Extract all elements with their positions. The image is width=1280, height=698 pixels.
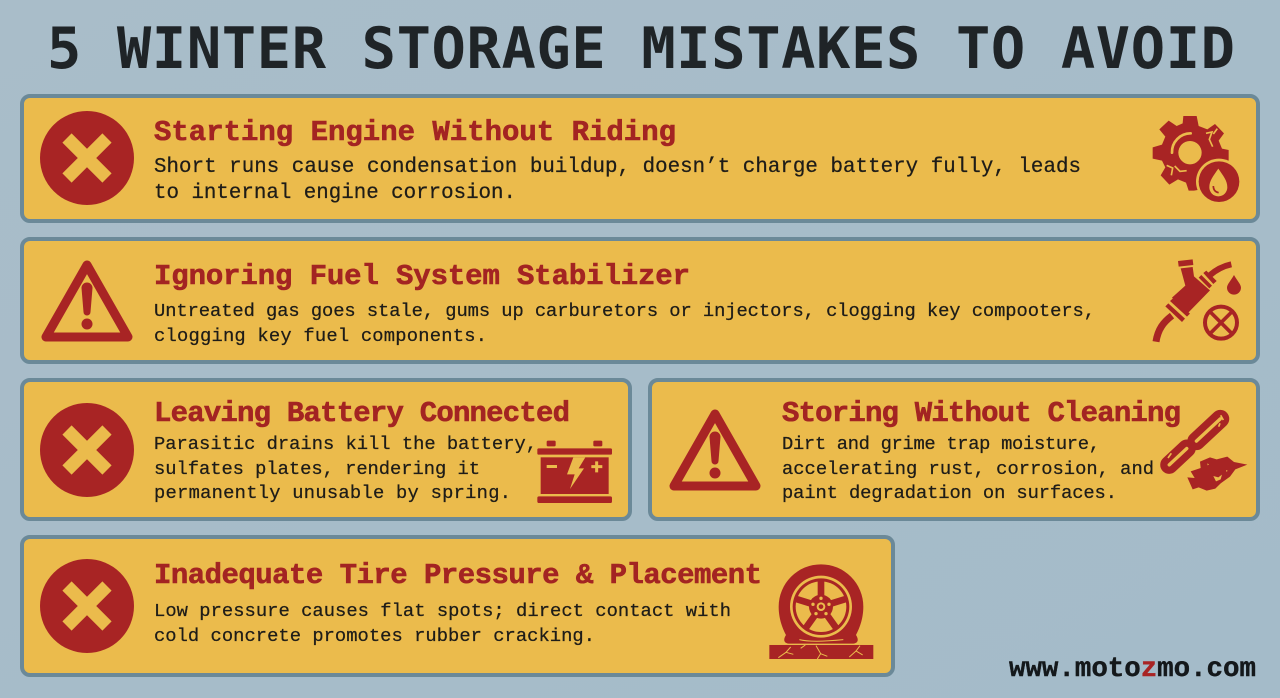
icon: warning triangle <box>46 265 128 337</box>
panel: storing without cleaning <box>650 380 1258 519</box>
body text: paint degradation on surfaces. <box>782 482 1117 504</box>
icon: car battery <box>537 441 612 503</box>
body text <box>154 433 537 504</box>
icon: flat tire on cracked concrete <box>769 564 873 659</box>
icon: red X circle <box>40 559 134 653</box>
body text: Dirt and grime trap moisture, <box>782 433 1100 455</box>
panel: inadequate tire pressure and placement <box>22 537 893 675</box>
heading: Inadequate Tire Pressure & Placement <box>154 559 762 592</box>
body text: Low pressure causes flat spots; direct contact with <box>154 600 731 622</box>
icon: red X circle <box>40 111 134 205</box>
panel: ignoring fuel system stabilizer <box>22 239 1258 362</box>
body text <box>782 433 1154 504</box>
body text: to internal engine corrosion. <box>154 182 516 205</box>
body text <box>154 300 1095 347</box>
body text: Parasitic drains kill the battery, <box>154 433 537 455</box>
website url: www.motozmo.com <box>1009 654 1256 685</box>
body text: Short runs cause condensation buildup, doesn’t charge battery fully, leads <box>154 156 1081 179</box>
icon: cracked gear with oil drop <box>1153 116 1242 205</box>
body text <box>154 156 1081 205</box>
icon: warning triangle <box>674 414 756 486</box>
heading: Ignoring Fuel System Stabilizer <box>154 260 690 293</box>
body text: cold concrete promotes rubber cracking. <box>154 625 595 647</box>
body text: clogging key fuel components. <box>154 325 487 347</box>
icon: rusty chain and rust patch <box>1162 411 1247 491</box>
icon: red X circle <box>40 403 134 497</box>
panel: leaving battery connected <box>22 380 630 519</box>
heading: Leaving Battery Connected <box>154 397 570 430</box>
body text: Untreated gas goes stale, gums up carburetors or injectors, clogging key compooters, <box>154 300 1095 322</box>
body text <box>154 600 731 647</box>
panel: starting engine without riding <box>22 96 1258 221</box>
body text: permanently unusable by spring. <box>154 482 511 504</box>
body text: accelerating rust, corrosion, and <box>782 458 1154 480</box>
icon: fuel nozzle with drop and blocked valve <box>1156 259 1241 342</box>
title: 5 WINTER STORAGE MISTAKES TO AVOID <box>47 16 1235 82</box>
heading: Starting Engine Without Riding <box>154 116 676 149</box>
body text: sulfates plates, rendering it <box>154 458 480 480</box>
heading: Storing Without Cleaning <box>782 397 1181 430</box>
